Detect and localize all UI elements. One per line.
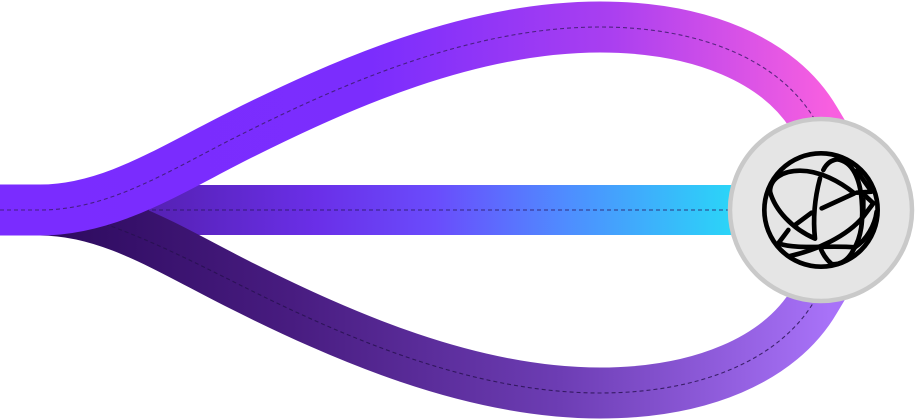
top stream xyxy=(0,27,845,210)
bottom stream xyxy=(0,210,845,393)
middle stream xyxy=(40,185,750,235)
hub circle xyxy=(730,119,912,301)
icon: globe xyxy=(764,153,878,267)
